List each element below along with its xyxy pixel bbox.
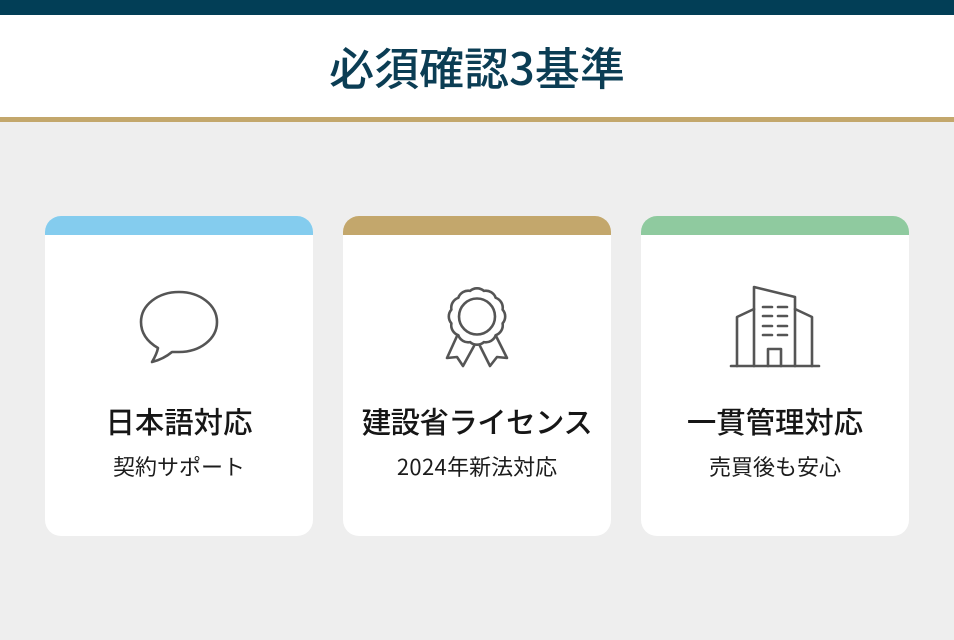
panel: 日本語対応	[45, 216, 313, 536]
icon: office building	[730, 286, 820, 368]
card subtext: 売買後も安心	[709, 450, 841, 482]
card subtext: 契約サポート	[113, 450, 245, 482]
card accent band: blue	[45, 216, 313, 235]
card accent band: green	[641, 216, 909, 235]
header panel	[0, 15, 954, 117]
gold header rule	[0, 117, 954, 122]
title: 必須確認3基準	[329, 33, 625, 98]
icon: award rosette	[446, 287, 508, 368]
panel: 一貫管理対応	[641, 216, 909, 536]
icon: speech bubble	[140, 290, 218, 364]
card heading: 日本語対応	[106, 400, 252, 442]
card heading: 一貫管理対応	[687, 400, 863, 442]
top navy band	[0, 0, 954, 15]
panel: 建設省ライセンス	[343, 216, 611, 536]
card heading: 建設省ライセンス	[362, 400, 592, 442]
card accent band: gold	[343, 216, 611, 235]
card subtext: 2024年新法対応	[397, 450, 557, 482]
